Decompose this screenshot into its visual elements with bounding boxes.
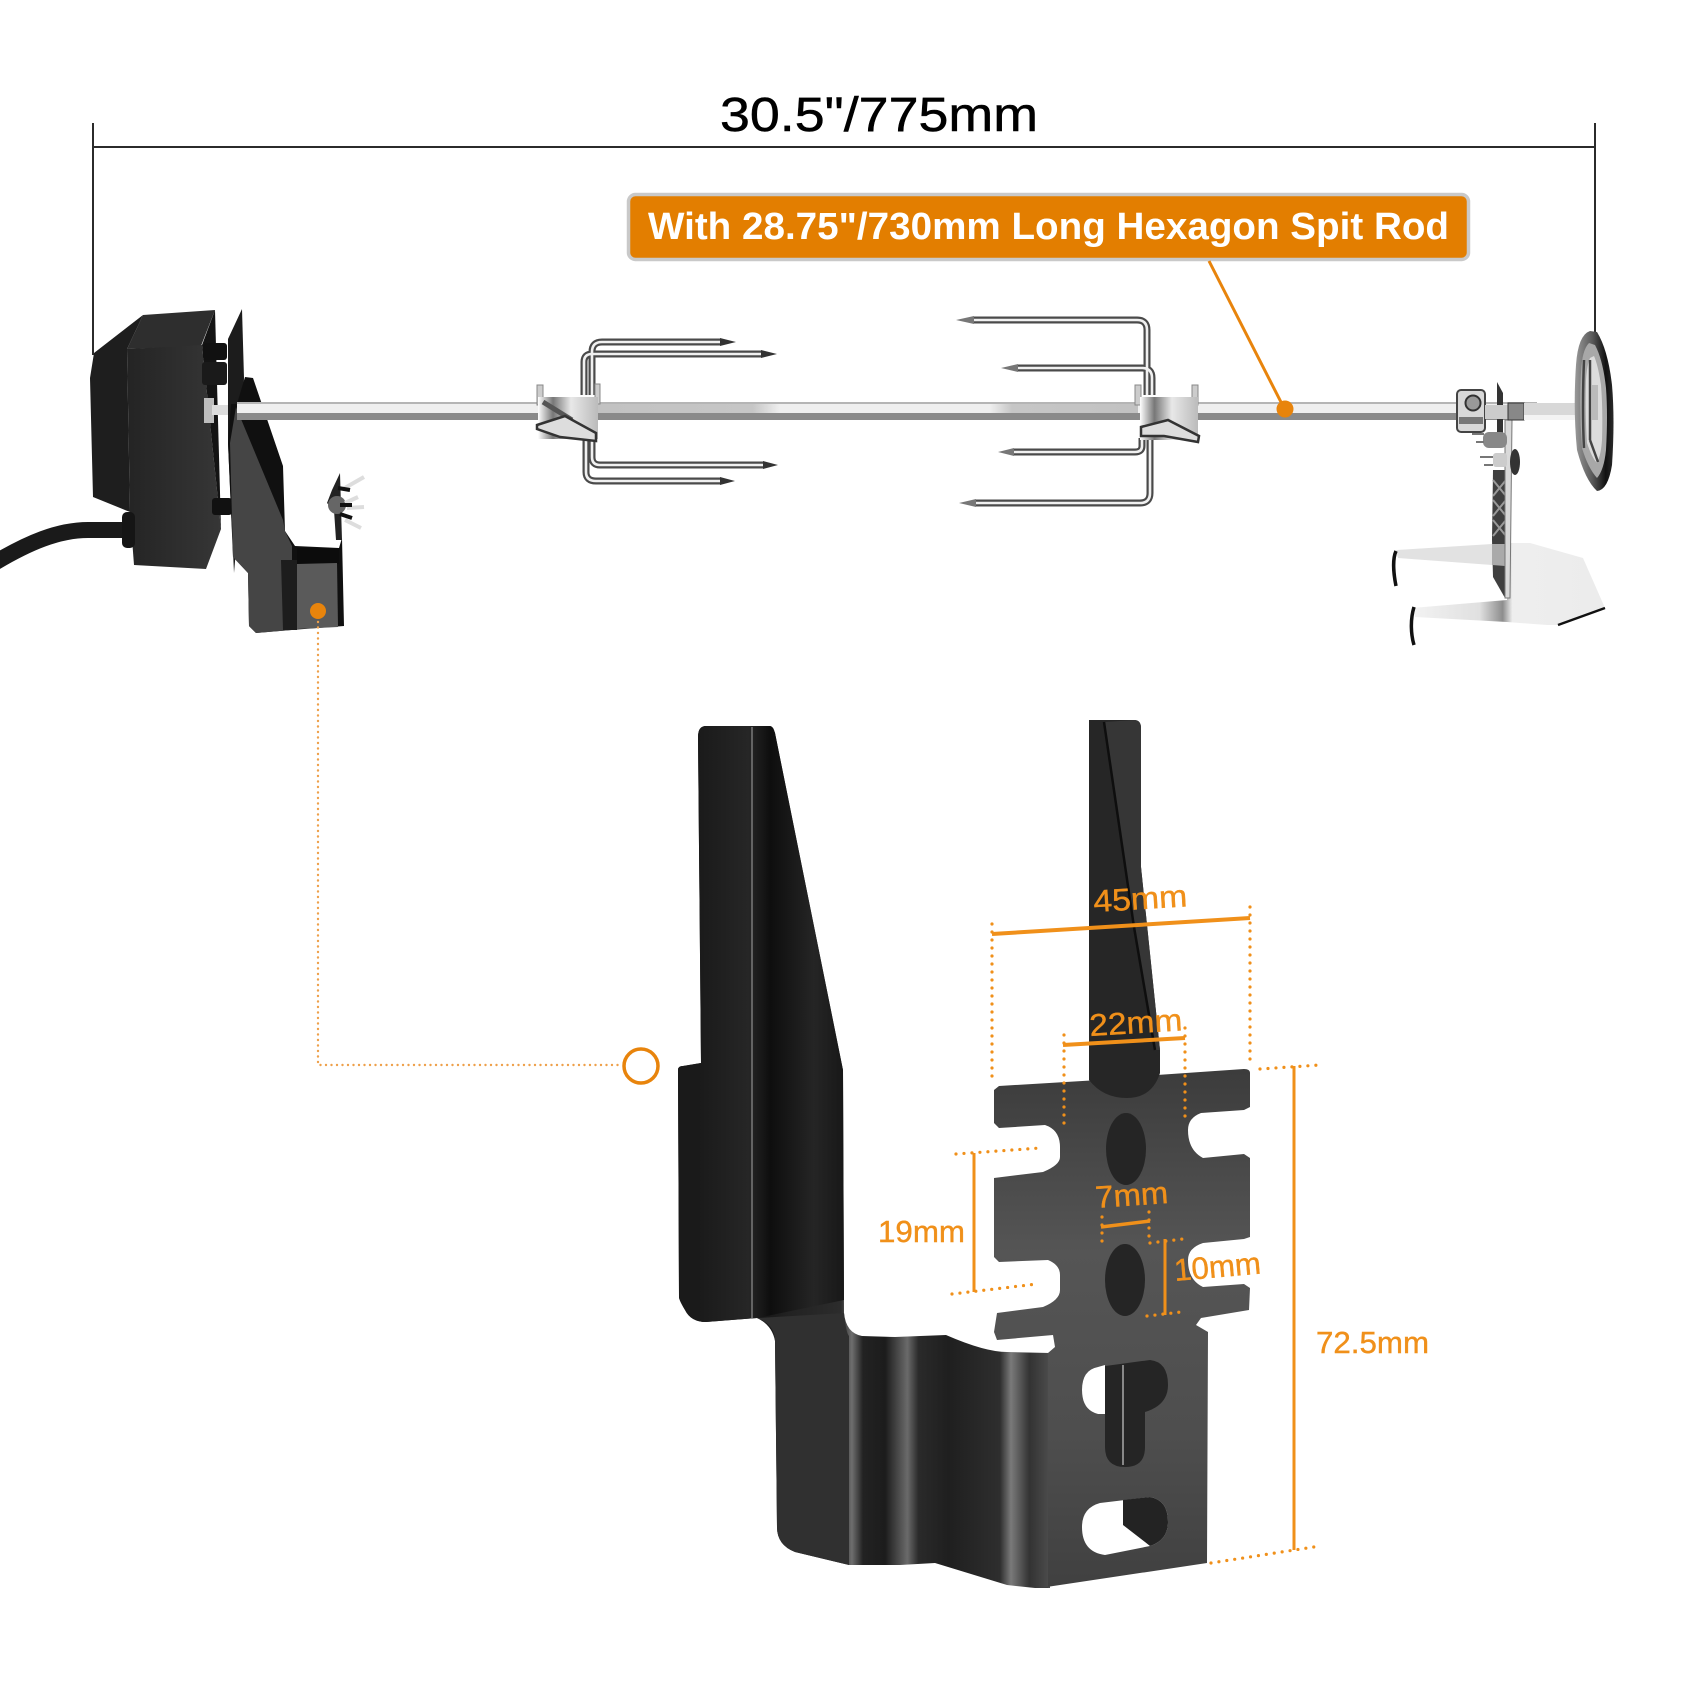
right fork [956,316,1199,507]
clamp [537,384,600,441]
dimension: 19mm: 19mm [878,1214,965,1249]
dimension: 22mm [1063,1002,1185,1128]
wing nut [327,473,364,540]
dotted connector [318,622,620,1065]
callout: spit rod [628,194,1468,260]
dimension: 22mm: 22mm [1088,1002,1183,1043]
bolts [1483,432,1507,448]
dimension: 72.5mm [1211,1065,1429,1563]
lower slot [1082,1497,1168,1555]
base plate [1412,543,1605,625]
collar [1457,390,1485,432]
keyhole [1082,1360,1168,1467]
prongs [972,320,1152,503]
dimension: 10mm [1147,1239,1262,1316]
small mounting bracket [228,309,344,633]
marker dot [310,603,326,619]
dimension: 10mm: 10mm [1173,1246,1262,1288]
connector from small bracket to detail [310,603,658,1083]
length label: 30.5"/775mm [720,89,1038,142]
dimension: 19mm [878,1148,1040,1294]
marker ring [624,1049,658,1083]
dimension lines [93,123,1595,355]
callout leader and dot [1209,261,1294,418]
dimension: 7mm [1094,1175,1169,1245]
dimension: 45mm [992,878,1250,1082]
feet [1394,551,1414,645]
right support stand [1394,382,1605,645]
slotted plate [994,1069,1250,1588]
dimension: 45mm: 45mm [1092,878,1188,919]
large bracket detail [678,720,1250,1588]
prong tips [720,338,778,485]
prong tips [956,316,1018,507]
vertical tab [1089,720,1160,1098]
slots [1106,1113,1146,1185]
motor [90,310,236,569]
left fork [537,338,778,485]
power cord [0,530,128,562]
handle wheel [1575,331,1614,491]
spit rod [237,402,1537,420]
diamond plate [1492,470,1506,598]
clamp [1135,385,1199,442]
dimension: 7mm: 7mm [1094,1175,1169,1215]
prongs [584,342,765,481]
dimension: 72.5mm: 72.5mm [1316,1325,1429,1360]
callout box [628,194,1468,260]
bracket side and U-section [678,726,1050,1588]
bushings [1485,405,1509,419]
upper side panel [678,726,844,1322]
callout text: With 28.75"/730mm Long Hexagon Spit Rod [648,206,1449,248]
